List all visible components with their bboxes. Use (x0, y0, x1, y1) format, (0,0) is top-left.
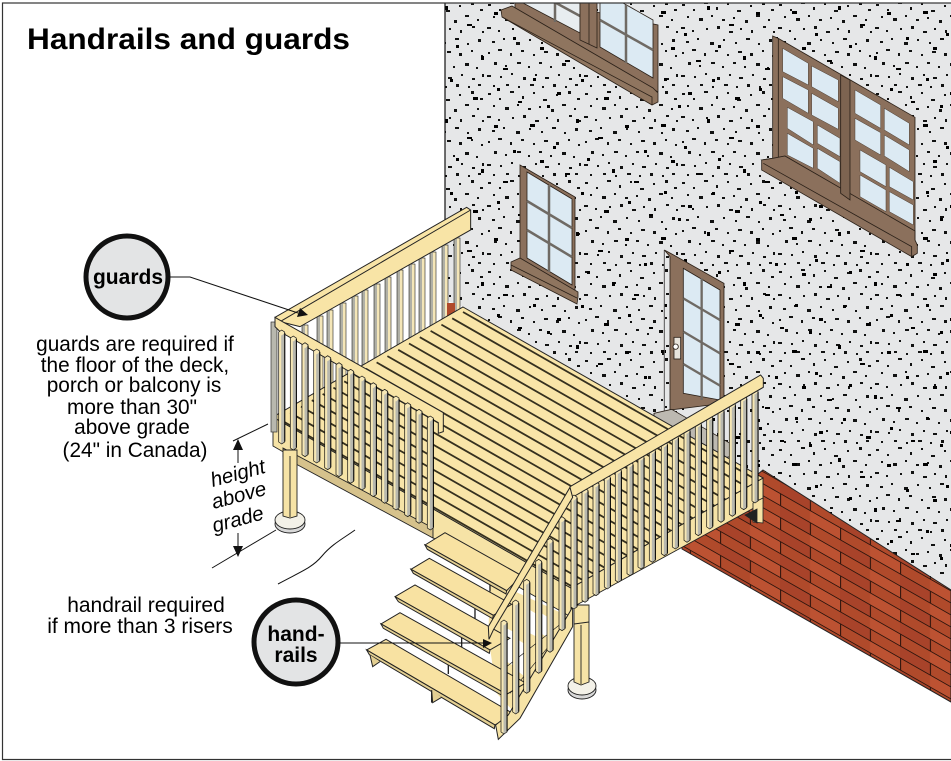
right support post and footing (568, 605, 596, 699)
handrail requirement note: if more than 3 risers (47, 615, 233, 638)
height above grade dimension: grade (210, 502, 266, 537)
height above grade dimension: above (209, 477, 269, 514)
stair tread 5 (367, 639, 514, 729)
handrails callout badge (254, 600, 338, 684)
handrail requirement note: handrail required (67, 594, 225, 617)
back guard top rail (275, 207, 471, 327)
stair tread 1 (425, 533, 522, 594)
brick foundation (682, 470, 951, 702)
ground line (278, 530, 355, 584)
guards requirement note: (24" in Canada) (63, 439, 207, 462)
guards requirement note: guards are required if (36, 333, 234, 356)
left guard corner post (271, 322, 277, 432)
right guard balusters (582, 389, 758, 602)
height above grade dimension: height (208, 455, 269, 492)
stair under-fill behind rail (488, 580, 573, 718)
handrail requirement note (47, 594, 233, 638)
guards requirement note: the floor of the deck, (41, 354, 229, 377)
left support post and footing (275, 450, 305, 533)
guards requirement note: above grade (74, 416, 190, 439)
guards callout badge (86, 236, 168, 318)
guards requirement note: more than 30" (67, 396, 197, 419)
height above grade dimension (208, 424, 276, 568)
guards requirement note: porch or balcony is (47, 374, 221, 397)
stair handrail (488, 487, 573, 639)
stair stringer (496, 607, 573, 739)
middle window (511, 165, 578, 304)
upper window pair (cropped) (501, 0, 658, 105)
right guard top rail (570, 375, 763, 498)
stairs (367, 533, 573, 739)
stair risers (432, 582, 490, 703)
stair guard balusters (501, 495, 577, 734)
handrails leader arrow (338, 639, 492, 648)
brick sliver at deck corner (447, 303, 455, 317)
left guard rail board (275, 317, 443, 433)
stair support feet (370, 655, 442, 703)
deck rim, front left (273, 417, 571, 617)
title: Handrails and guards (27, 23, 350, 56)
left guard balusters (279, 330, 433, 530)
back guard balusters (302, 238, 460, 400)
guards requirement note (36, 333, 234, 462)
upper right window pair (762, 36, 917, 257)
small rear post at deck corner (745, 498, 763, 523)
door (654, 250, 730, 460)
stair tread 2 (411, 558, 512, 619)
guards callout badge: guards (93, 266, 163, 289)
guards leader arrow (168, 277, 308, 317)
deck rim, right (571, 478, 763, 608)
wall with stipple texture (445, 3, 951, 591)
handrails callout badge: rails (274, 644, 318, 667)
deck surface with boards (273, 307, 783, 602)
stair tread 3 (395, 585, 510, 653)
stair tread 4 (381, 613, 526, 698)
wall corner line (444, 3, 446, 305)
handrails callout badge: hand- (267, 623, 325, 646)
